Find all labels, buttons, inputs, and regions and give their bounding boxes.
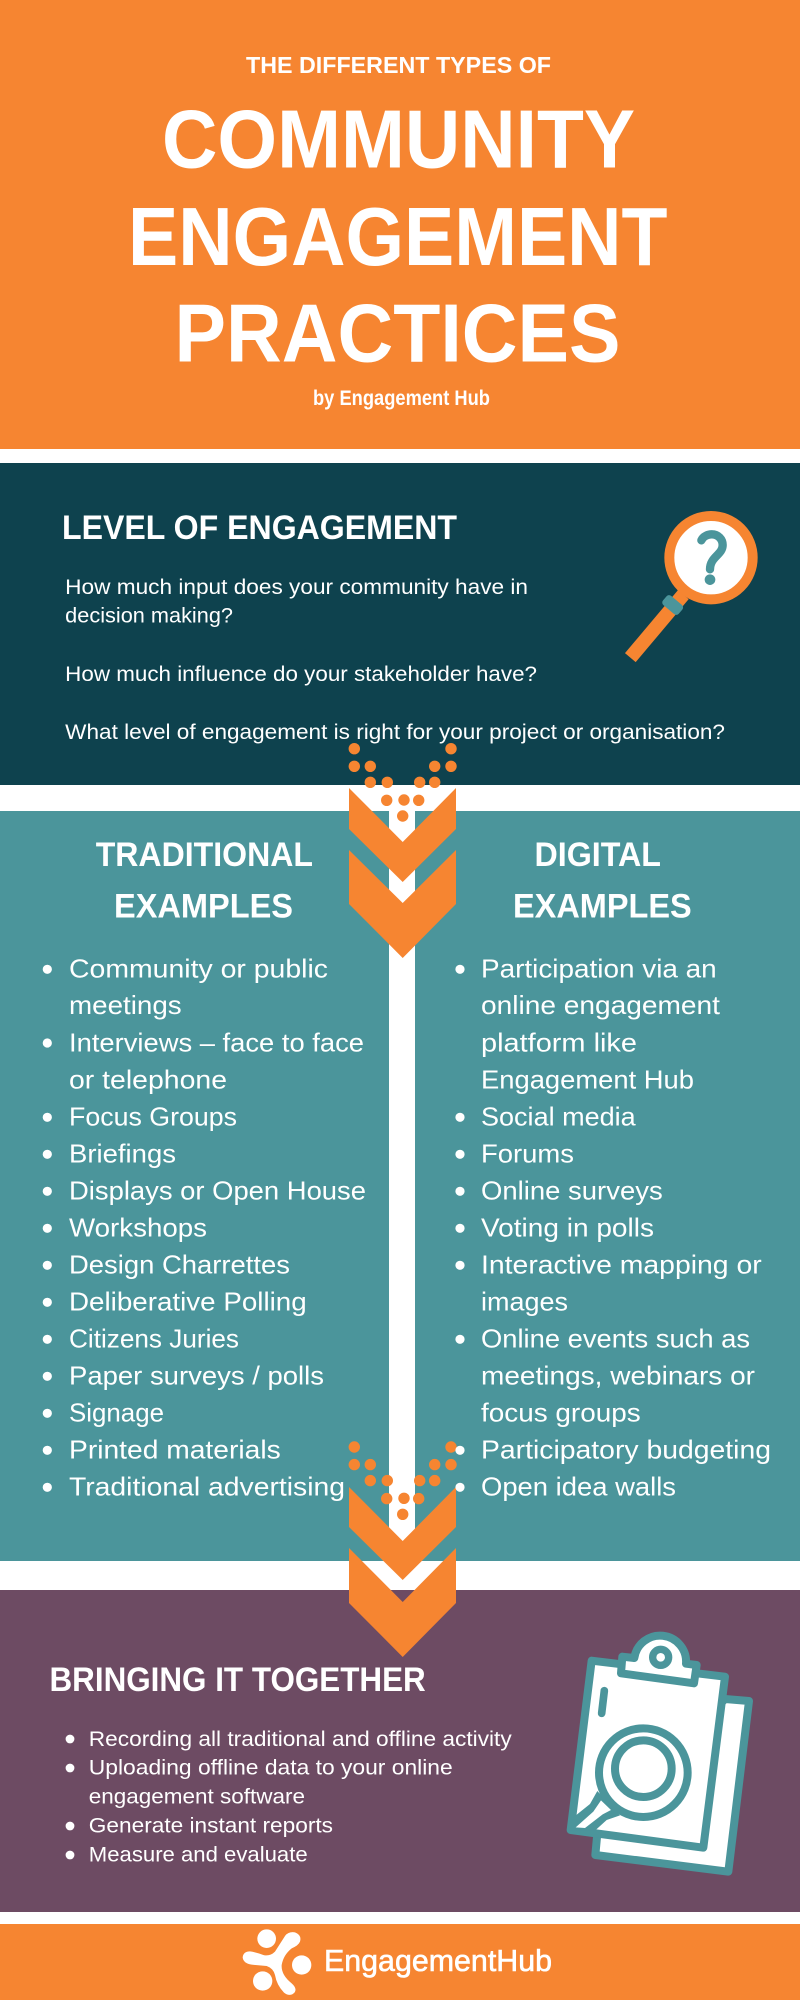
traditional examples list: Printed materials bbox=[69, 1434, 281, 1464]
digital examples list: focus groups bbox=[481, 1398, 641, 1428]
digital examples list: Online events such as bbox=[481, 1323, 750, 1353]
bringing it together list: Measure and evaluate bbox=[89, 1843, 308, 1867]
heading: level of engagement: LEVEL OF ENGAGEMENT bbox=[62, 509, 457, 547]
digital examples list: Engagement Hub bbox=[481, 1064, 694, 1094]
heading: bringing it together: BRINGING IT TOGETHER bbox=[50, 1661, 426, 1699]
icon: magnifying glass with question mark bbox=[630, 516, 753, 658]
digital examples list: images bbox=[481, 1286, 568, 1316]
heading: digital examples bbox=[513, 836, 692, 926]
digital examples list: Forums bbox=[481, 1138, 574, 1168]
digital examples list: Voting in polls bbox=[481, 1212, 654, 1242]
digital examples list: Participatory budgeting bbox=[481, 1434, 771, 1464]
traditional examples list bbox=[43, 953, 366, 1502]
title line 2: ENGAGEMENT bbox=[128, 190, 668, 283]
digital examples list: online engagement bbox=[481, 990, 721, 1020]
title line 1: COMMUNITY bbox=[162, 92, 635, 186]
heading: traditional examples: TRADITIONAL bbox=[96, 836, 313, 874]
heading: digital examples: DIGITAL bbox=[534, 836, 661, 874]
digital examples list: Open idea walls bbox=[481, 1472, 676, 1502]
title block bbox=[128, 52, 668, 410]
traditional examples list: Focus Groups bbox=[69, 1102, 237, 1132]
chevrons and dots connector: bottom bbox=[349, 1441, 457, 1657]
footer logo bbox=[243, 1929, 552, 1995]
questions text bbox=[65, 575, 725, 744]
questions text: How much input does your community have in bbox=[65, 575, 528, 599]
bringing it together text bbox=[50, 1661, 512, 1867]
heading: traditional examples bbox=[96, 836, 313, 926]
column: traditional examples bbox=[43, 836, 366, 1502]
byline: by Engagement Hub bbox=[313, 387, 490, 410]
icon: clipboard with magnifier bbox=[569, 1636, 749, 1872]
digital examples list: Interactive mapping or bbox=[481, 1249, 762, 1279]
traditional examples list: Traditional advertising bbox=[69, 1472, 345, 1502]
bringing it together list: Uploading offline data to your online bbox=[89, 1756, 453, 1780]
traditional examples list: Signage bbox=[69, 1398, 164, 1428]
column: digital examples bbox=[455, 836, 771, 1502]
traditional examples list: Workshops bbox=[69, 1212, 207, 1242]
traditional examples list: Paper surveys / polls bbox=[69, 1360, 324, 1390]
questions text: decision making? bbox=[65, 604, 233, 628]
traditional examples list: or telephone bbox=[69, 1064, 227, 1094]
traditional examples list: Citizens Juries bbox=[69, 1323, 239, 1353]
traditional examples list: Deliberative Polling bbox=[69, 1286, 307, 1316]
heading: traditional examples: EXAMPLES bbox=[114, 888, 293, 926]
panel: level of engagement background bbox=[0, 463, 800, 785]
heading: digital examples: EXAMPLES bbox=[513, 888, 692, 926]
bringing it together list: engagement software bbox=[89, 1785, 305, 1809]
digital examples list: platform like bbox=[481, 1027, 637, 1057]
questions text: How much influence do your stakeholder have? bbox=[65, 662, 537, 686]
panel: footer background bbox=[0, 1924, 800, 2000]
traditional examples list: meetings bbox=[69, 990, 182, 1020]
questions text: What level of engagement is right for your project or organisation? bbox=[65, 720, 725, 744]
level of engagement text bbox=[62, 509, 725, 744]
traditional examples list: Design Charrettes bbox=[69, 1249, 290, 1279]
traditional examples list: Community or public bbox=[69, 953, 328, 983]
bringing it together list bbox=[66, 1727, 512, 1867]
panel: header background bbox=[0, 0, 800, 449]
title line 3: PRACTICES bbox=[174, 286, 620, 380]
digital examples list bbox=[455, 953, 771, 1502]
digital examples list: Online surveys bbox=[481, 1176, 663, 1206]
bringing it together list: Recording all traditional and offline activity bbox=[89, 1727, 512, 1751]
digital examples list: Participation via an bbox=[481, 953, 717, 983]
eyebrow heading: THE DIFFERENT TYPES OF bbox=[246, 52, 551, 78]
traditional examples list: Interviews – face to face bbox=[69, 1027, 364, 1057]
logo wordmark: EngagementHub bbox=[324, 1943, 552, 1978]
chevrons and dots connector: top bbox=[349, 743, 457, 958]
panel: bringing it together background bbox=[0, 1590, 800, 1912]
icon: engagement hub logo mark bbox=[243, 1929, 311, 1995]
digital examples list: meetings, webinars or bbox=[481, 1360, 755, 1390]
digital examples list: Social media bbox=[481, 1102, 636, 1132]
traditional examples list: Briefings bbox=[69, 1138, 176, 1168]
bringing it together list: Generate instant reports bbox=[89, 1814, 333, 1838]
traditional examples list: Displays or Open House bbox=[69, 1176, 366, 1206]
panel: examples background bbox=[0, 811, 800, 1561]
central white connector bar bbox=[389, 811, 415, 1561]
